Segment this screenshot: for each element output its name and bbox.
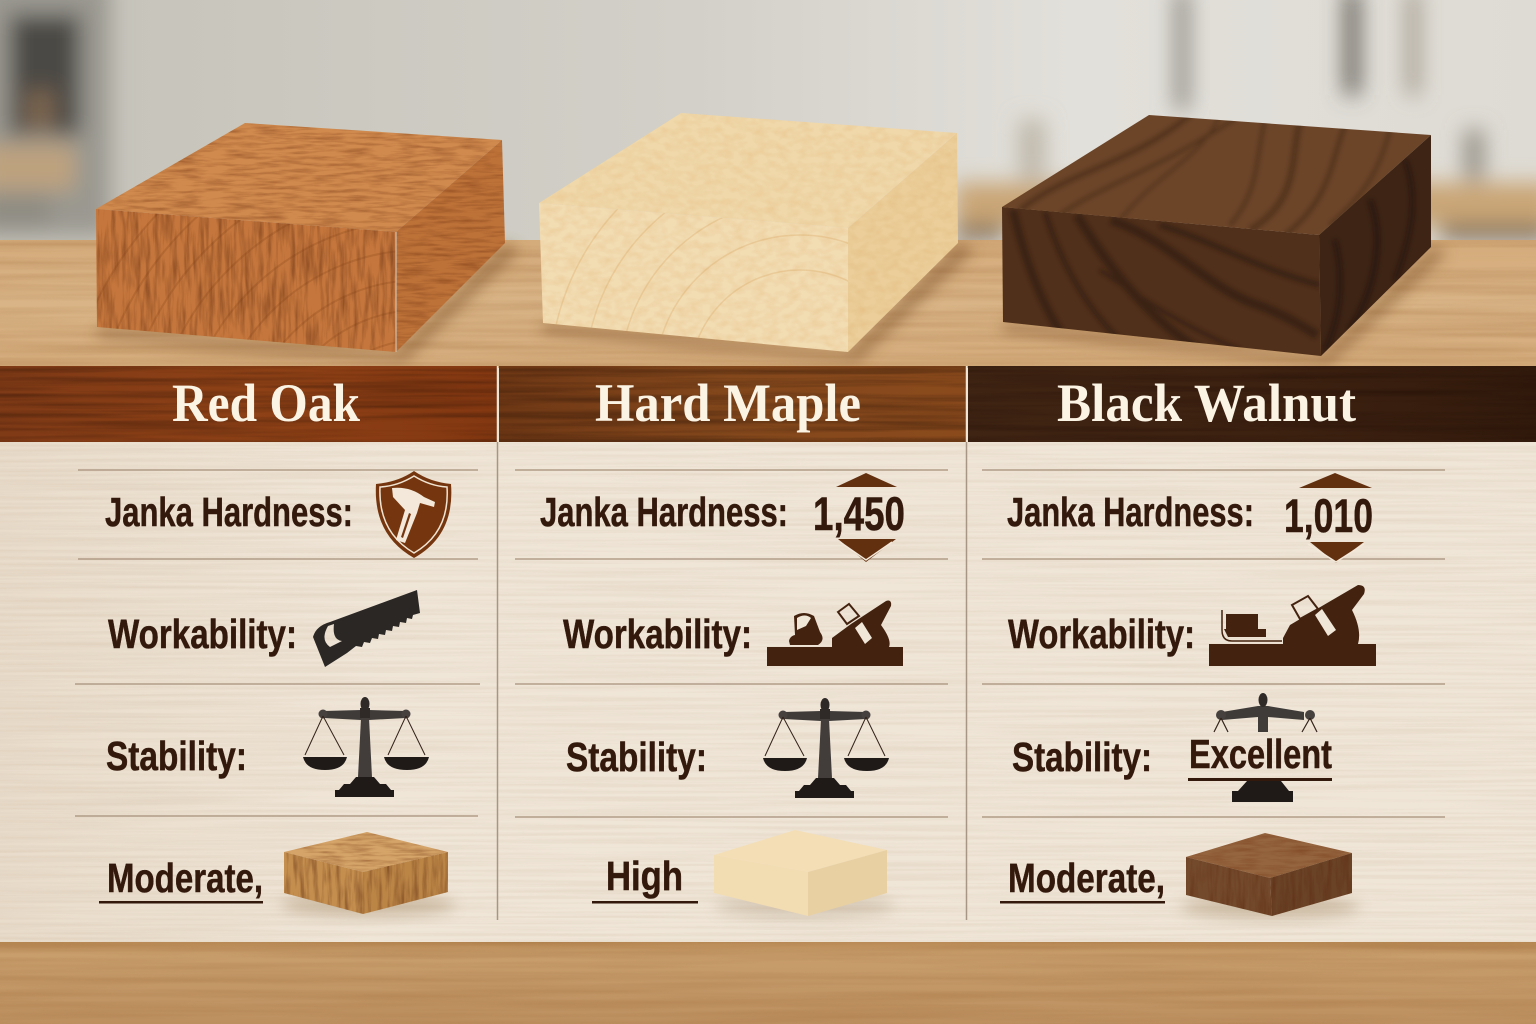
label: Red Oak Stability: Stability: bbox=[106, 733, 247, 779]
header band: Red Oak bbox=[0, 366, 497, 442]
icon: shield behind value bbox=[836, 473, 897, 562]
icon: balance scale top bbox=[1214, 693, 1317, 732]
wood block: hard maple bbox=[539, 113, 958, 352]
value: Moderate: Moderate, bbox=[1008, 855, 1165, 901]
icon: shield behind value bbox=[1299, 473, 1372, 563]
icon: hand plane bbox=[1209, 585, 1376, 666]
header band: Black Walnut bbox=[968, 366, 1536, 442]
icon: hammer shield bbox=[376, 471, 451, 558]
comparison panel background bbox=[0, 442, 1536, 942]
icon: hand plane bbox=[767, 601, 903, 666]
header band: Hard Maple bbox=[499, 366, 966, 442]
bottom wooden shelf bbox=[0, 942, 1536, 1024]
value: 1,010: 1,010 bbox=[1284, 489, 1373, 542]
background: blurred workshop wall bbox=[0, 0, 1536, 245]
row rules bbox=[75, 470, 1445, 817]
column: Red Oak bbox=[99, 471, 456, 917]
icon: balance scale bbox=[763, 698, 889, 798]
icon: hand saw bbox=[313, 590, 420, 667]
column: Black Walnut bbox=[1000, 473, 1376, 919]
label: Hard Maple Workability: Workability: bbox=[563, 611, 752, 657]
value: High: High bbox=[606, 853, 683, 899]
label: Black Walnut Workability: Workability: bbox=[1008, 611, 1195, 657]
icon: small maple block bbox=[714, 830, 895, 918]
wood block: black walnut bbox=[1002, 115, 1431, 356]
label: Hard Maple Janka Hardness: Janka Hardness: bbox=[540, 489, 788, 535]
header band: Hard Maple: Hard Maple bbox=[595, 373, 861, 433]
label: Red Oak Janka Hardness: Janka Hardness: bbox=[105, 489, 353, 535]
label: Black Walnut Stability: Stability: bbox=[1012, 734, 1152, 780]
value: 1,450: 1,450 bbox=[813, 487, 905, 540]
column: Hard Maple bbox=[540, 473, 905, 918]
header band: Red Oak: Red Oak bbox=[172, 373, 360, 433]
block shadows on table bbox=[95, 243, 1448, 366]
value: Excellent: Excellent bbox=[1189, 731, 1332, 777]
wood block: red oak bbox=[96, 123, 505, 352]
column dividers bbox=[498, 366, 966, 920]
icon: small oak block bbox=[280, 832, 456, 917]
label: Red Oak Workability: Workability: bbox=[108, 611, 297, 657]
icon: balance scale bbox=[303, 697, 429, 797]
icon: small walnut block bbox=[1180, 833, 1360, 919]
icon: balance scale base bbox=[1232, 781, 1293, 802]
value: Moderate: Moderate, bbox=[107, 855, 263, 901]
label: Hard Maple Stability: Stability: bbox=[566, 734, 707, 780]
background: wooden tabletop bbox=[0, 240, 1536, 368]
header band: Black Walnut: Black Walnut bbox=[1057, 373, 1356, 433]
label: Black Walnut Janka Hardness: Janka Hardness: bbox=[1007, 489, 1254, 535]
